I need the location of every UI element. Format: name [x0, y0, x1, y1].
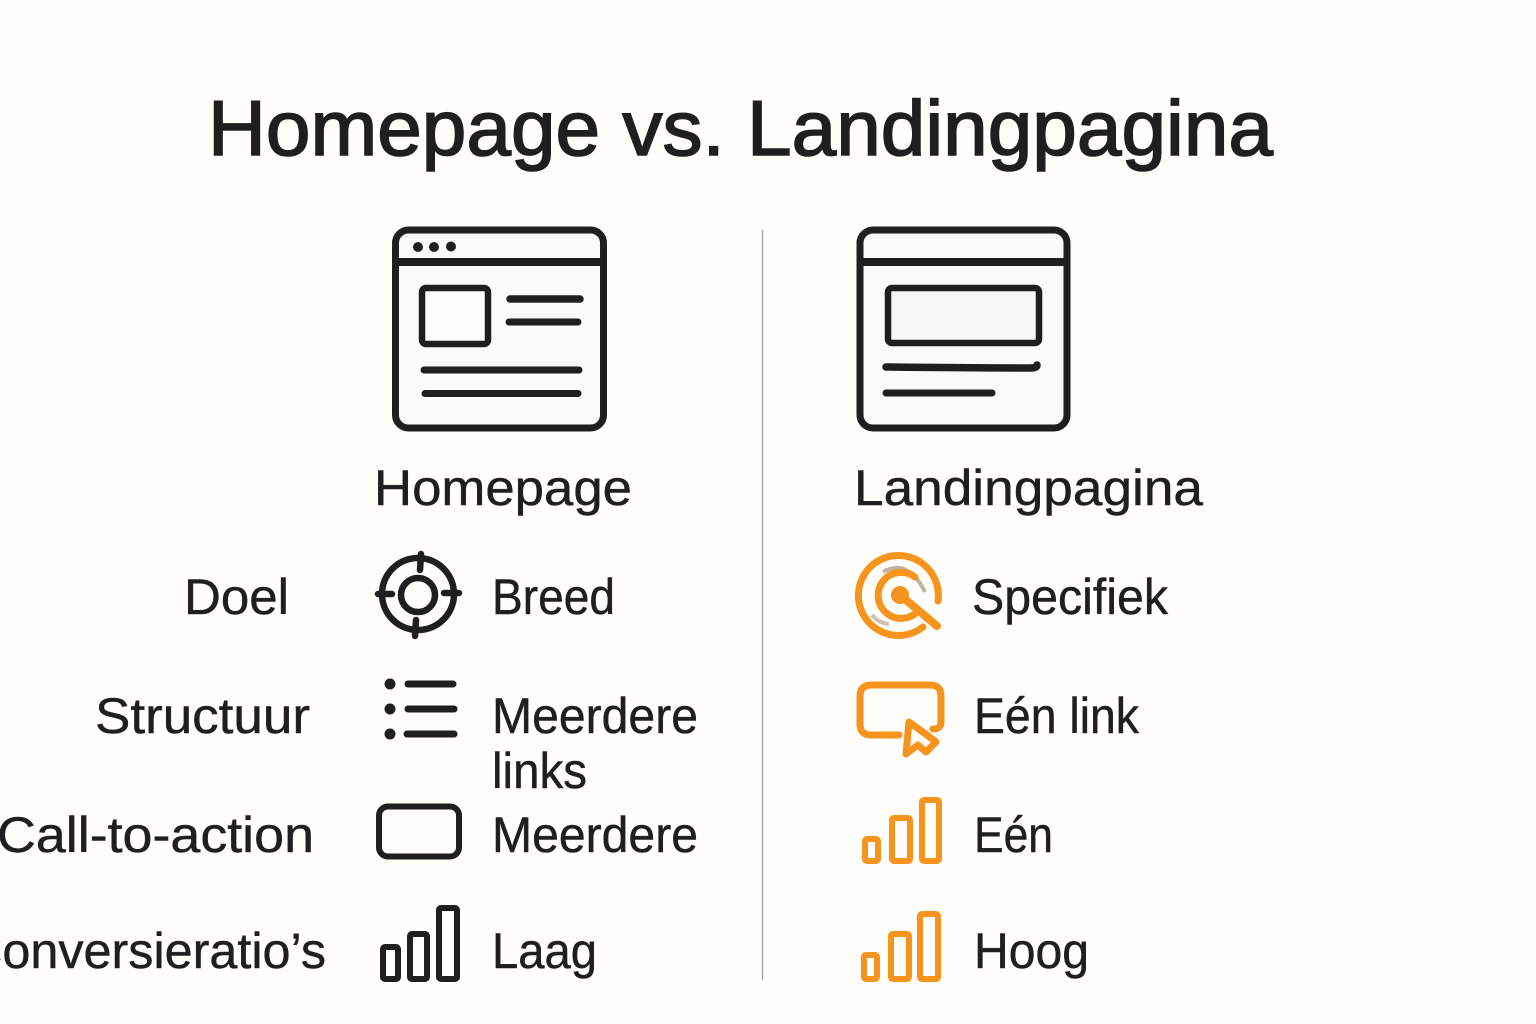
heading: Landingpagina: Landingpagina [854, 460, 1203, 516]
icon: orange bars high [865, 800, 939, 861]
value: Meerdere links: Meerdere [492, 688, 698, 744]
value: Eén link: Eén link [974, 688, 1140, 744]
icon: orange target [858, 555, 938, 635]
value: Specifiek: Specifiek [972, 569, 1169, 625]
value: Laag: Laag [492, 923, 597, 979]
center divider [762, 230, 764, 980]
value: Eén: Eén [974, 807, 1053, 863]
icon: button outline [379, 806, 459, 856]
icon: landing page browser window [860, 230, 1067, 428]
heading: Homepage: Homepage [374, 460, 632, 516]
icon: black bars [383, 908, 457, 979]
row label: Doel: Doel [184, 569, 289, 625]
icon: homepage browser window [396, 230, 604, 428]
value: Meerdere: Meerdere [492, 807, 698, 863]
row label: Structuur: Structuur [95, 688, 310, 744]
icon: list [384, 678, 454, 740]
value: Breed: Breed [492, 569, 615, 625]
icon: orange click button [860, 685, 941, 754]
title: Homepage vs. Landingpagina [208, 84, 1274, 172]
icon: orange bars [864, 914, 938, 979]
icon: crosshair target [378, 554, 459, 636]
row label: Call-to-action: Call-to-action [0, 807, 314, 863]
value: Meerdere links: links [492, 743, 587, 799]
value: Hoog: Hoog [974, 923, 1089, 979]
